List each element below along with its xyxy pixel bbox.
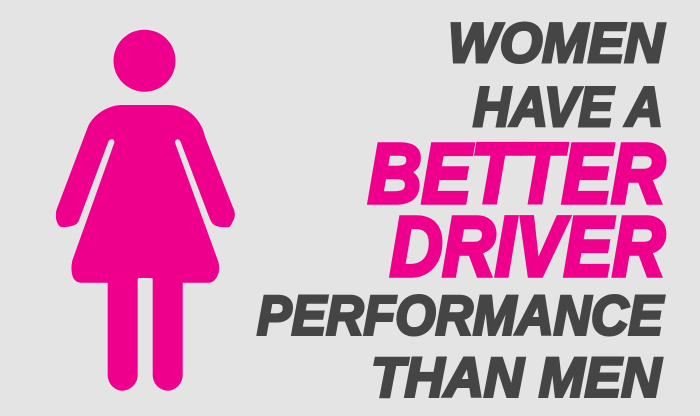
headline text [257,11,666,409]
figure head [114,30,176,92]
icon: woman figure [56,30,235,391]
line: BETTER: BETTER [368,127,665,221]
line: PERFORMANCE: PERFORMANCE [257,284,665,346]
line: HAVE A: HAVE A [473,75,663,138]
line: THAN MEN: THAN MEN [371,346,663,408]
line: WOMEN: WOMEN [448,11,666,74]
line: DRIVER: DRIVER [390,199,665,293]
figure body [56,105,235,391]
